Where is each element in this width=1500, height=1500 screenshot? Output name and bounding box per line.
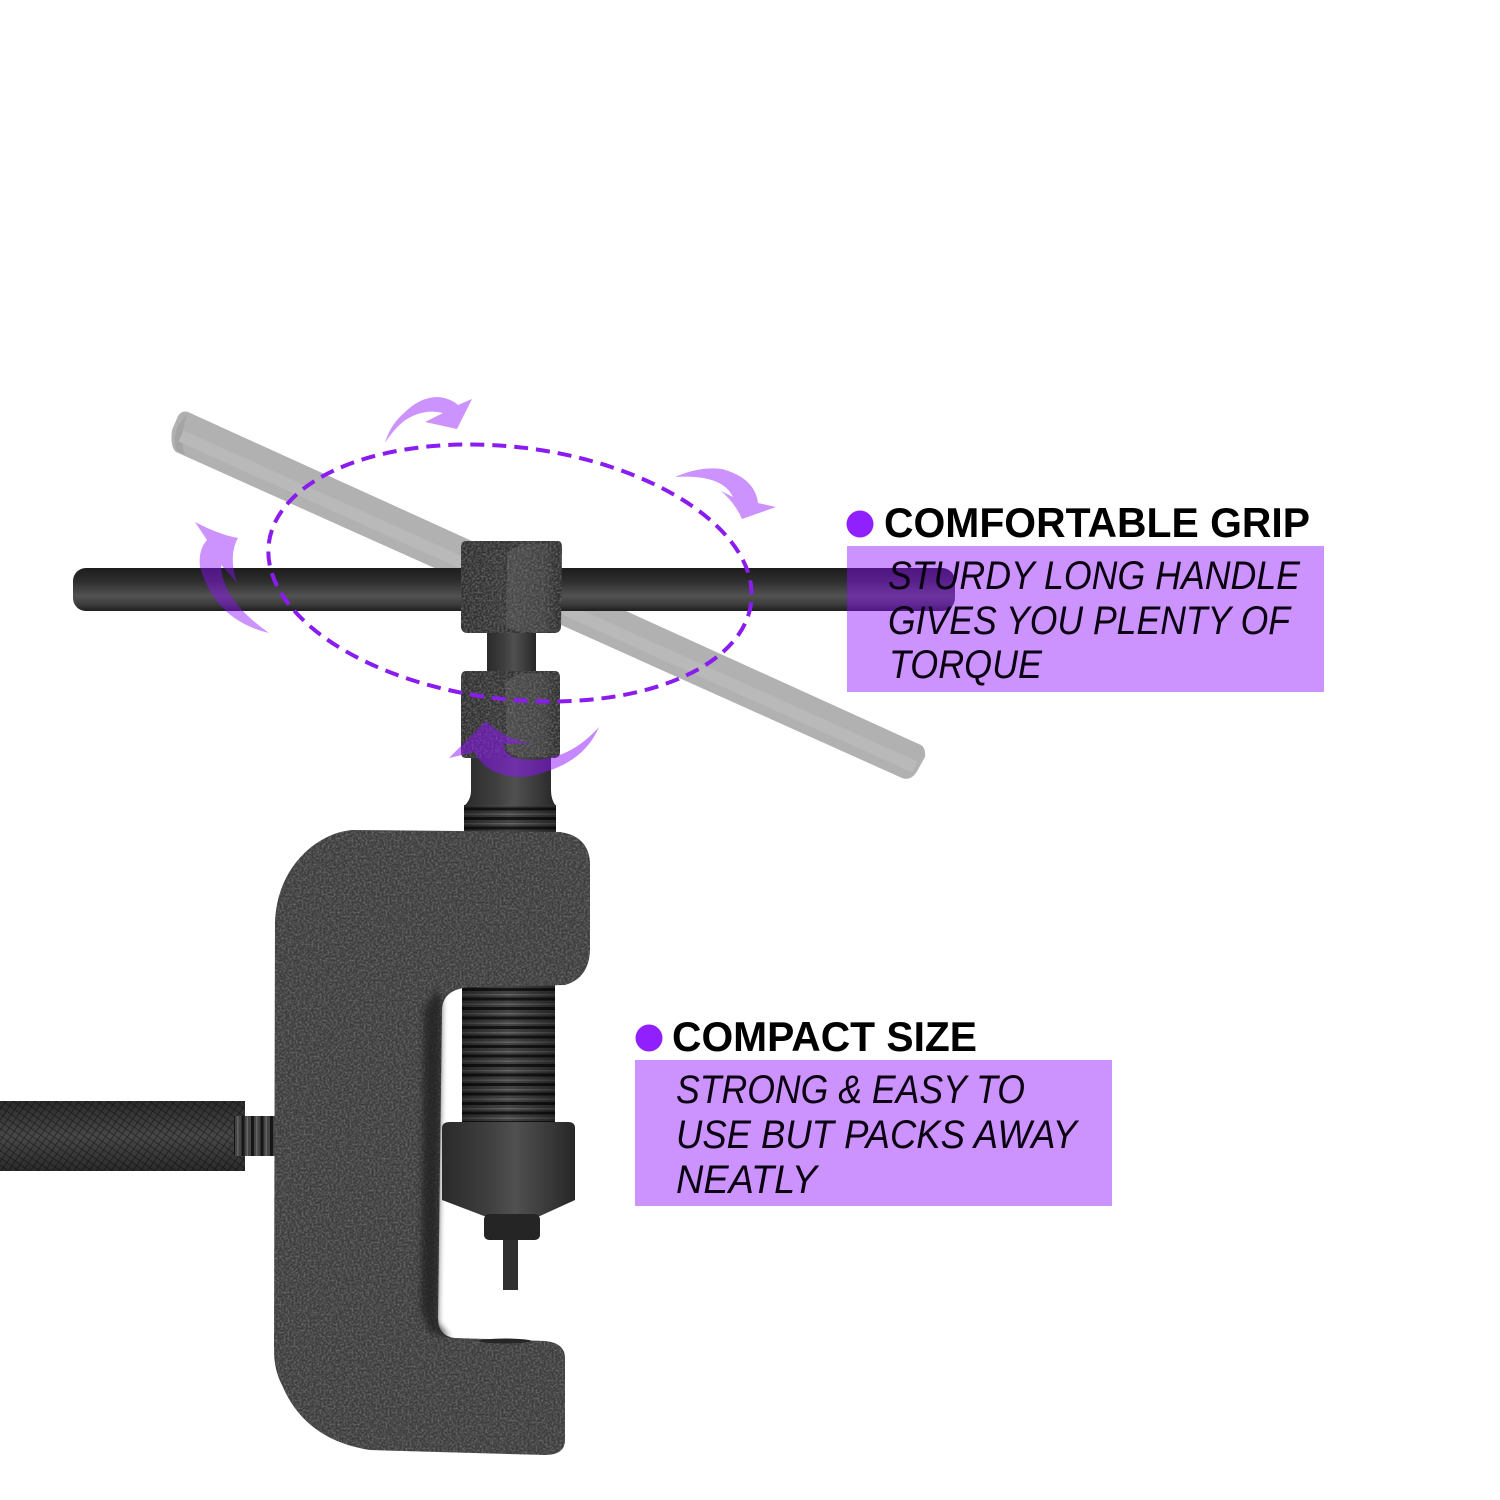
ghost handle: rotated position [172, 412, 925, 779]
body text: STURDY LONG HANDLE [888, 554, 1301, 598]
clamp lower-lip hole [479, 1338, 531, 1344]
C-clamp body [274, 830, 590, 1455]
rotation path: dashed ellipse [253, 418, 767, 728]
press collar [442, 1122, 575, 1290]
solid T-handle bar [73, 568, 955, 611]
upper shaft and thread [464, 758, 556, 834]
bullet [846, 510, 874, 538]
heading: COMPACT SIZE [672, 1013, 977, 1060]
heading: COMFORTABLE GRIP [884, 499, 1310, 546]
arrow: right [675, 468, 776, 519]
body text: TORQUE [889, 643, 1043, 687]
callout: comfortable grip [846, 499, 1324, 692]
lower screw thread [462, 975, 555, 1127]
bullet [636, 1024, 662, 1052]
body text: STRONG & EASY TO [676, 1068, 1025, 1112]
body text: USE BUT PACKS AWAY [676, 1113, 1080, 1157]
arrow: bottom [449, 721, 599, 777]
highlight box [635, 1060, 1112, 1206]
body text: GIVES YOU PLENTY OF [888, 599, 1292, 643]
knurled side handle [0, 1101, 282, 1171]
highlight box [847, 546, 1324, 692]
body text: NEATLY [676, 1158, 820, 1202]
arrow: top [385, 397, 472, 443]
arrow: left [195, 522, 269, 633]
lower hex nut [461, 671, 560, 758]
top hex nut [461, 541, 562, 633]
clamp inner edge shading [421, 990, 450, 1338]
neck between nuts [487, 628, 536, 676]
callout: compact size [635, 1013, 1112, 1206]
